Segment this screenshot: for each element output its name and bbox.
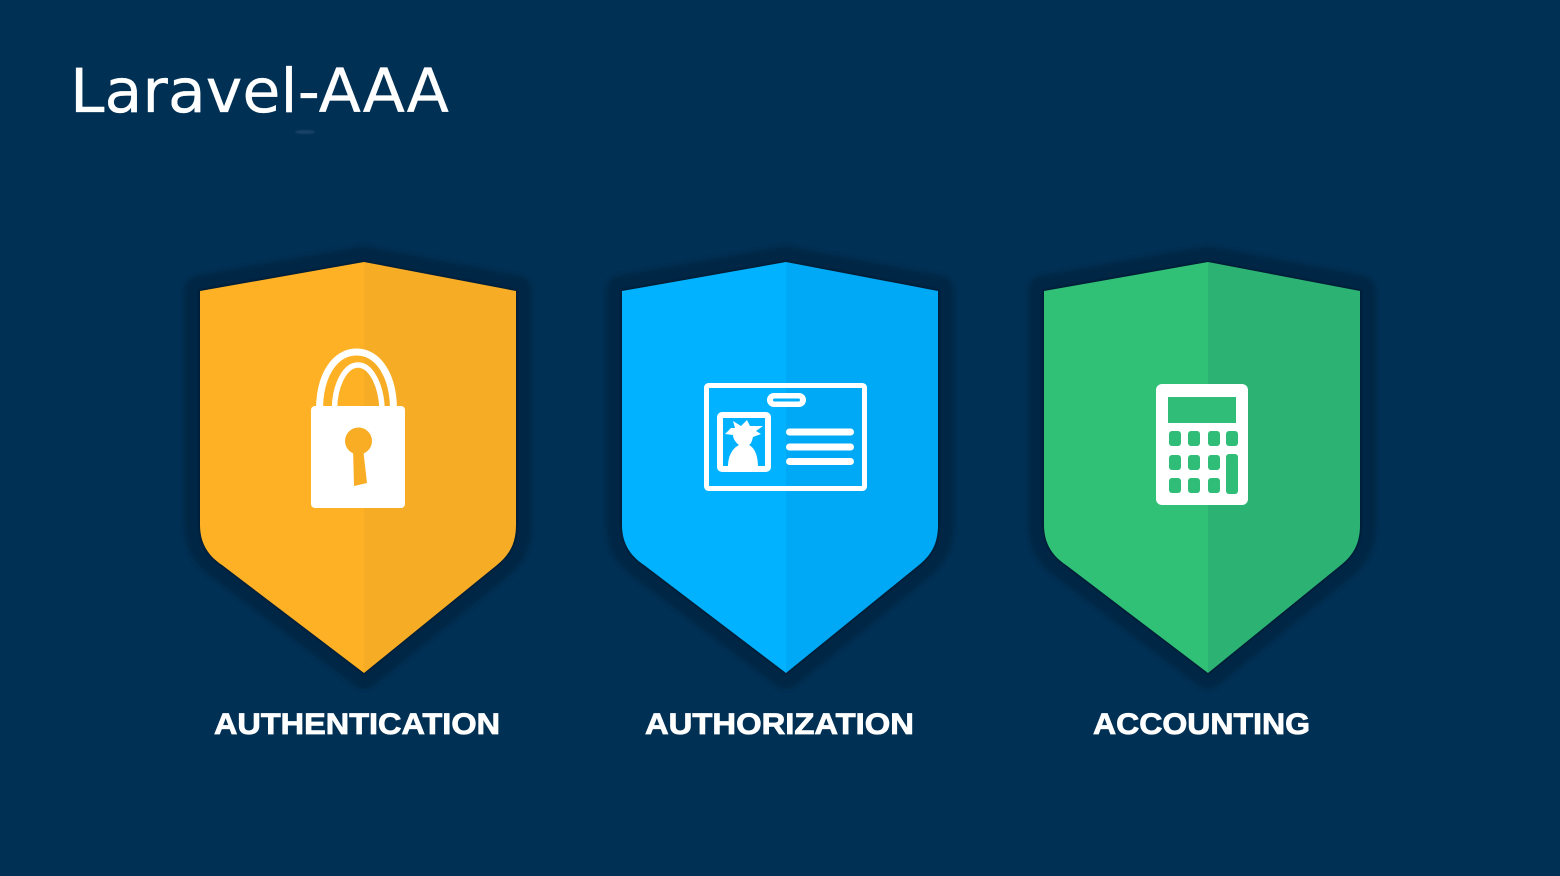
label: authentication: AUTHENTICATION: [214, 708, 500, 741]
label: accounting: ACCOUNTING: [1093, 708, 1310, 741]
title: Laravel-AAA: [70, 56, 449, 127]
icon: id card: [706, 386, 864, 488]
panel: authorization shield: [622, 262, 938, 673]
icon: calculator: [1156, 384, 1248, 505]
panel: accounting shield: [1044, 262, 1360, 673]
label: authorization: AUTHORIZATION: [645, 708, 914, 741]
icon: padlock: [311, 352, 405, 508]
panel: authentication shield: [200, 262, 516, 673]
